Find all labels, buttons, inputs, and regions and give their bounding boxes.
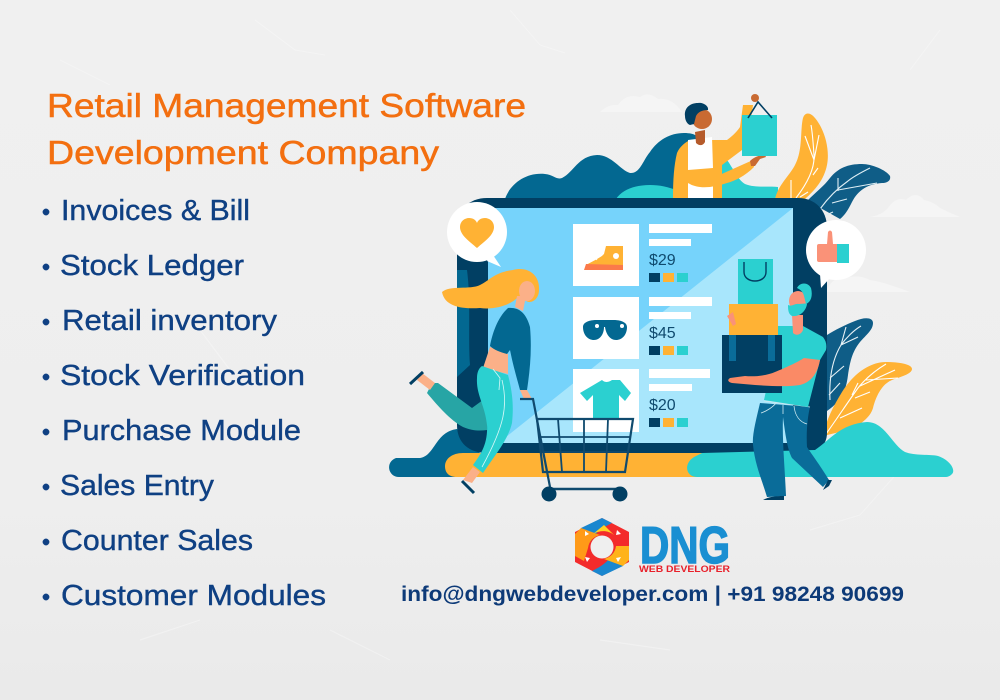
title: Retail Management Software — [47, 87, 526, 124]
man's arm — [728, 358, 820, 386]
speech bubble: heart — [447, 202, 507, 267]
plant: top blue leaf — [808, 164, 890, 219]
product row: t-shirt — [573, 369, 710, 432]
midriff — [483, 347, 508, 374]
product row: t-shirt: $20 — [649, 397, 676, 414]
feature list: Counter Sales — [61, 525, 253, 557]
neck and face — [515, 296, 526, 311]
feature list: Sales Entry — [60, 470, 215, 502]
feature list: Customer Modules — [61, 580, 326, 612]
shopping cart — [520, 399, 633, 502]
dark monitor tail — [805, 345, 827, 448]
logo mark — [575, 518, 629, 576]
product row: sunglasses — [573, 297, 712, 359]
feature list: Stock Verification — [60, 360, 305, 392]
logo wordmark: DNG — [640, 517, 730, 575]
shirt — [764, 326, 826, 407]
product row: shoe: $29 — [649, 252, 676, 269]
neck and head — [792, 315, 803, 335]
man holding shopping bag — [673, 94, 766, 198]
back leg — [427, 383, 487, 431]
contact line: info@dngwebdeveloper.com | +91 98248 90699 — [401, 583, 904, 606]
top — [490, 308, 531, 390]
plant: lower yellow leaf — [823, 362, 912, 436]
feature list: Retail inventory — [62, 305, 278, 337]
stacked packages — [722, 259, 782, 393]
feature list: Purchase Module — [62, 415, 301, 447]
speech bubble: thumbs up — [806, 220, 866, 288]
feature list — [43, 195, 326, 612]
product row: sunglasses: $45 — [649, 325, 676, 342]
logo wordmark: WEB DEVELOPER — [639, 564, 730, 575]
title: Development Company — [47, 134, 440, 171]
front foot — [463, 467, 480, 483]
teal hill — [687, 422, 953, 477]
hair — [442, 269, 539, 308]
hand — [520, 390, 532, 399]
laptop base — [445, 453, 720, 477]
bearded man carrying packages — [753, 284, 832, 500]
product row: shoe — [573, 224, 712, 286]
illustration: back hills — [505, 133, 778, 199]
front leg — [473, 366, 513, 473]
pants — [753, 403, 829, 497]
feature list: Invoices & Bill — [61, 195, 250, 227]
plant: lower blue leaf — [827, 318, 873, 411]
laptop monitor — [457, 198, 827, 453]
clouds — [600, 94, 960, 292]
title — [47, 87, 526, 171]
girl with cart — [410, 269, 539, 493]
plant: top yellow leaf — [775, 114, 828, 199]
shopping bag — [742, 102, 777, 156]
base: dark blue hill — [389, 429, 480, 477]
feature list: Stock Ledger — [60, 250, 244, 282]
